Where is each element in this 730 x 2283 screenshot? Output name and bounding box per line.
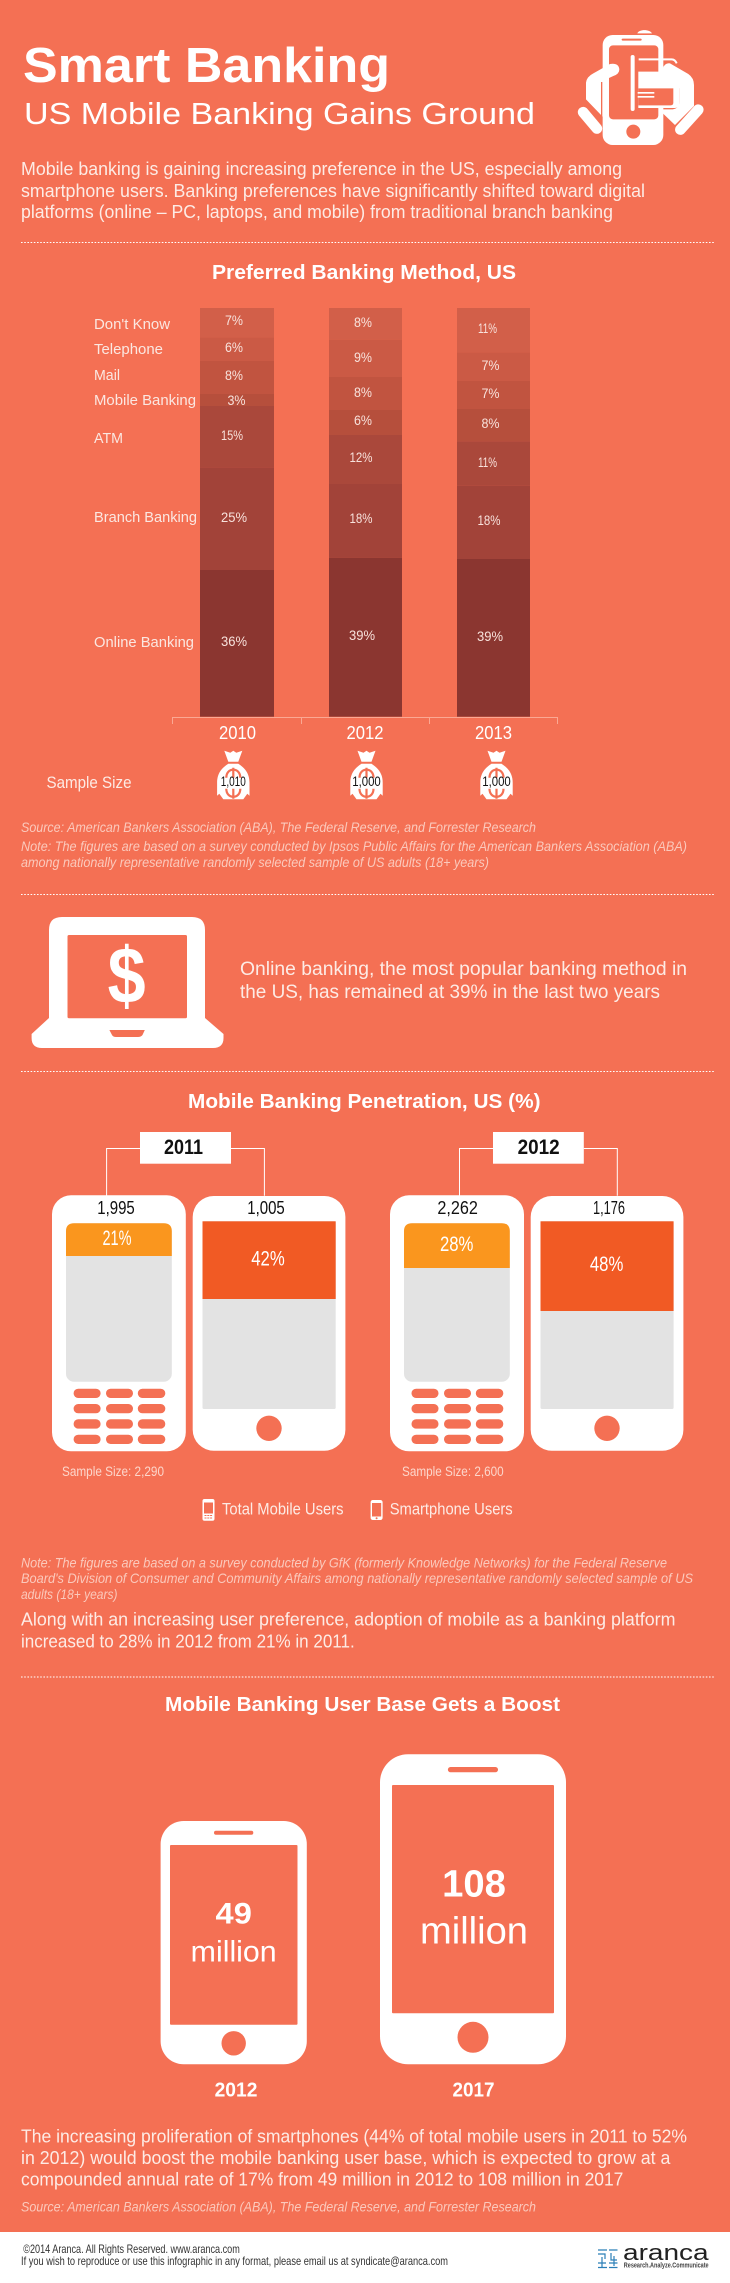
icon: money bag 2012 [350,751,383,799]
subtitle: US Mobile Banking Gains Ground [24,96,535,131]
stacked bar: 2010 [200,308,274,717]
stacked bar: 2010: 36% [221,633,247,649]
icon: money bag 2010: 1,010 [221,774,246,789]
phone: 2012 [161,1821,307,2064]
panel: preferred banking method [21,262,687,870]
sample size row [46,751,513,799]
x axis with years: 2013 [475,722,512,743]
x axis with years: 2012 [346,722,384,743]
legend [202,1499,513,1521]
stacked bar: 2010: 7% [225,312,243,328]
panel: mobile banking penetration [21,1091,694,1651]
intro paragraph: smartphone users. Banking preferences have significantly shifted toward digital [21,181,645,201]
closing paragraph: The increasing proliferation of smartphones (44% of total mobile users in 2011 to 52% [21,2126,687,2146]
copyright text [21,2242,448,2268]
stacked bar: 2013: 7% [482,357,500,373]
stacked bar: 2013: 7% [482,385,500,401]
smartphone 2012: 48% [590,1253,623,1276]
closing paragraph [21,2126,687,2190]
feature phone 2011: 1,995 [97,1198,135,1218]
copyright text: If you wish to reproduce or use this infographic in any format, please email us at syndicate@aranca.com [21,2254,448,2268]
copyright text: ©2014 Aranca. All Rights Reserved. www.aranca.com [23,2242,240,2256]
legend: Smartphone Users [390,1500,513,1518]
stacked bar: 2013: 11% [478,454,497,470]
legend: Total Mobile Users [222,1500,344,1518]
heading: Preferred Banking Method, US [212,262,516,284]
stacked bar: 2012: 8% [354,314,372,330]
closing paragraph: in 2012) would boost the mobile banking user base, which is expected to grow at a [21,2148,671,2168]
takeaway text: increased to 28% in 2012 from 21% in 2011. [21,1631,355,1651]
icon: hands holding phone with card [576,30,706,145]
legend labels: Telephone [94,342,163,358]
year tag 2011 [107,1132,264,1196]
legend labels: Don't Know [94,317,171,333]
smartphone 2011: 1,005 [247,1198,285,1218]
stacked bar: 2012: 9% [354,349,372,365]
year labels: 2017 [452,2079,494,2102]
group: 2011 [52,1132,345,1479]
heading: Mobile Banking Penetration, US (%) [188,1091,540,1113]
feature phone 2011 [52,1195,186,1451]
note [21,1554,694,1602]
intro paragraph: platforms (online – PC, laptops, and mobile) from traditional branch banking [21,202,613,222]
callout text [240,959,687,1003]
logo: aranca: aranca [623,2240,709,2265]
icon: money bag 2010 [217,751,250,799]
feature phone 2011: 21% [102,1227,132,1250]
year tag 2012 [460,1132,617,1196]
sample size 2011: Sample Size: 2,290 [62,1464,164,1479]
intro paragraph: Mobile banking is gaining increasing preference in the US, especially among [21,159,622,179]
phone: 2017: 108 [442,1864,506,1906]
legend labels: ATM [94,431,123,447]
takeaway text [21,1610,676,1651]
icon: total mobile users [202,1499,214,1521]
stacked bar: 2010: 3% [228,392,246,408]
stacked bar: 2013 [457,308,530,717]
legend labels: Branch Banking [94,510,197,526]
logo: aranca [598,2240,709,2270]
title: Smart Banking [23,39,390,93]
year tag 2011: 2011 [164,1136,203,1159]
smartphone 2012: 1,176 [593,1198,625,1218]
sample size 2012: Sample Size: 2,600 [402,1464,504,1479]
source: Source: American Bankers Association (ABA), The Federal Reserve, and Forrester Research [21,2198,536,2214]
icon: money bag 2013 [480,751,513,799]
x axis with years [172,718,558,743]
intro paragraph [21,159,645,222]
stacked bar: 2013: 18% [478,512,500,528]
footer [0,2232,730,2283]
stacked bar: 2013: 11% [478,320,497,336]
legend labels: Mail [94,368,120,384]
phone: 2017: million [420,1910,528,1952]
note: adults (18+ years) [21,1586,118,1602]
stacked bar: 2012: 39% [349,627,375,643]
group: 2012 [390,1132,683,1479]
icon: money bag 2013: 1,000 [482,774,511,789]
smartphone 2011 [193,1196,345,1451]
phone: 2012: 49 [216,1897,252,1930]
callout text: the US, has remained at 39% in the last two years [240,982,660,1003]
stacked bar: 2012: 12% [350,449,372,465]
smartphone 2012 [531,1196,683,1451]
legend labels: Online Banking [94,635,194,651]
closing paragraph: compounded annual rate of 17% from 49 million in 2012 to 108 million in 2017 [21,2170,623,2190]
year labels: 2012 [215,2079,257,2102]
phone: 2012: million [191,1936,277,1969]
sample size row: Sample Size [46,774,132,792]
year tag 2012: 2012 [518,1136,560,1159]
stacked bar: 2010: 15% [221,427,243,443]
feature phone 2012: 2,262 [437,1198,478,1218]
smartphone 2011: 42% [251,1248,285,1270]
stacked bar: 2012: 18% [350,510,372,526]
phone: 2017 [380,1754,566,2064]
stacked bar: 2013: 39% [477,628,503,644]
icon: money bag 2012: 1,000 [352,774,381,789]
icon: smartphone users [371,1500,383,1520]
stacked bar: 2010: 8% [225,367,243,383]
stacked bar: 2010: 25% [221,509,247,525]
stacked bar: 2012: 8% [354,384,372,400]
header panel [21,30,706,222]
source and note [21,819,687,870]
callout text: Online banking, the most popular banking method in [240,959,687,980]
stacked bar: 2013: 8% [482,415,500,431]
panel: online banking callout [32,917,687,1048]
stacked bar: 2010: 6% [225,339,243,355]
icon: laptop with dollar [32,917,223,1048]
logo: aranca: Research.Analyze.Communicate [624,2263,709,2270]
note: Note: The figures are based on a survey conducted by GfK (formerly Knowledge Networks) for the Federal Reserve [21,1554,667,1570]
heading: Mobile Banking User Base Gets a Boost [165,1694,560,1716]
legend labels [94,317,197,651]
x axis with years: 2010 [219,722,256,743]
year labels [215,2079,494,2102]
icon: laptop with dollar: $ [108,931,146,1020]
takeaway text: Along with an increasing user preference, adoption of mobile as a banking platform [21,1610,676,1630]
feature phone 2012: 28% [440,1233,473,1256]
legend labels: Mobile Banking [94,393,196,409]
stacked bar: 2012 [329,308,402,717]
stacked bar: 2012: 6% [354,412,372,428]
feature phone 2012 [390,1195,524,1451]
source and note: among nationally representative randomly selected sample of US adults (18+ years) [21,854,489,870]
panel: user base boost [21,1694,687,2214]
source and note: Source: American Bankers Association (ABA), The Federal Reserve, and Forrester Research [21,819,536,835]
